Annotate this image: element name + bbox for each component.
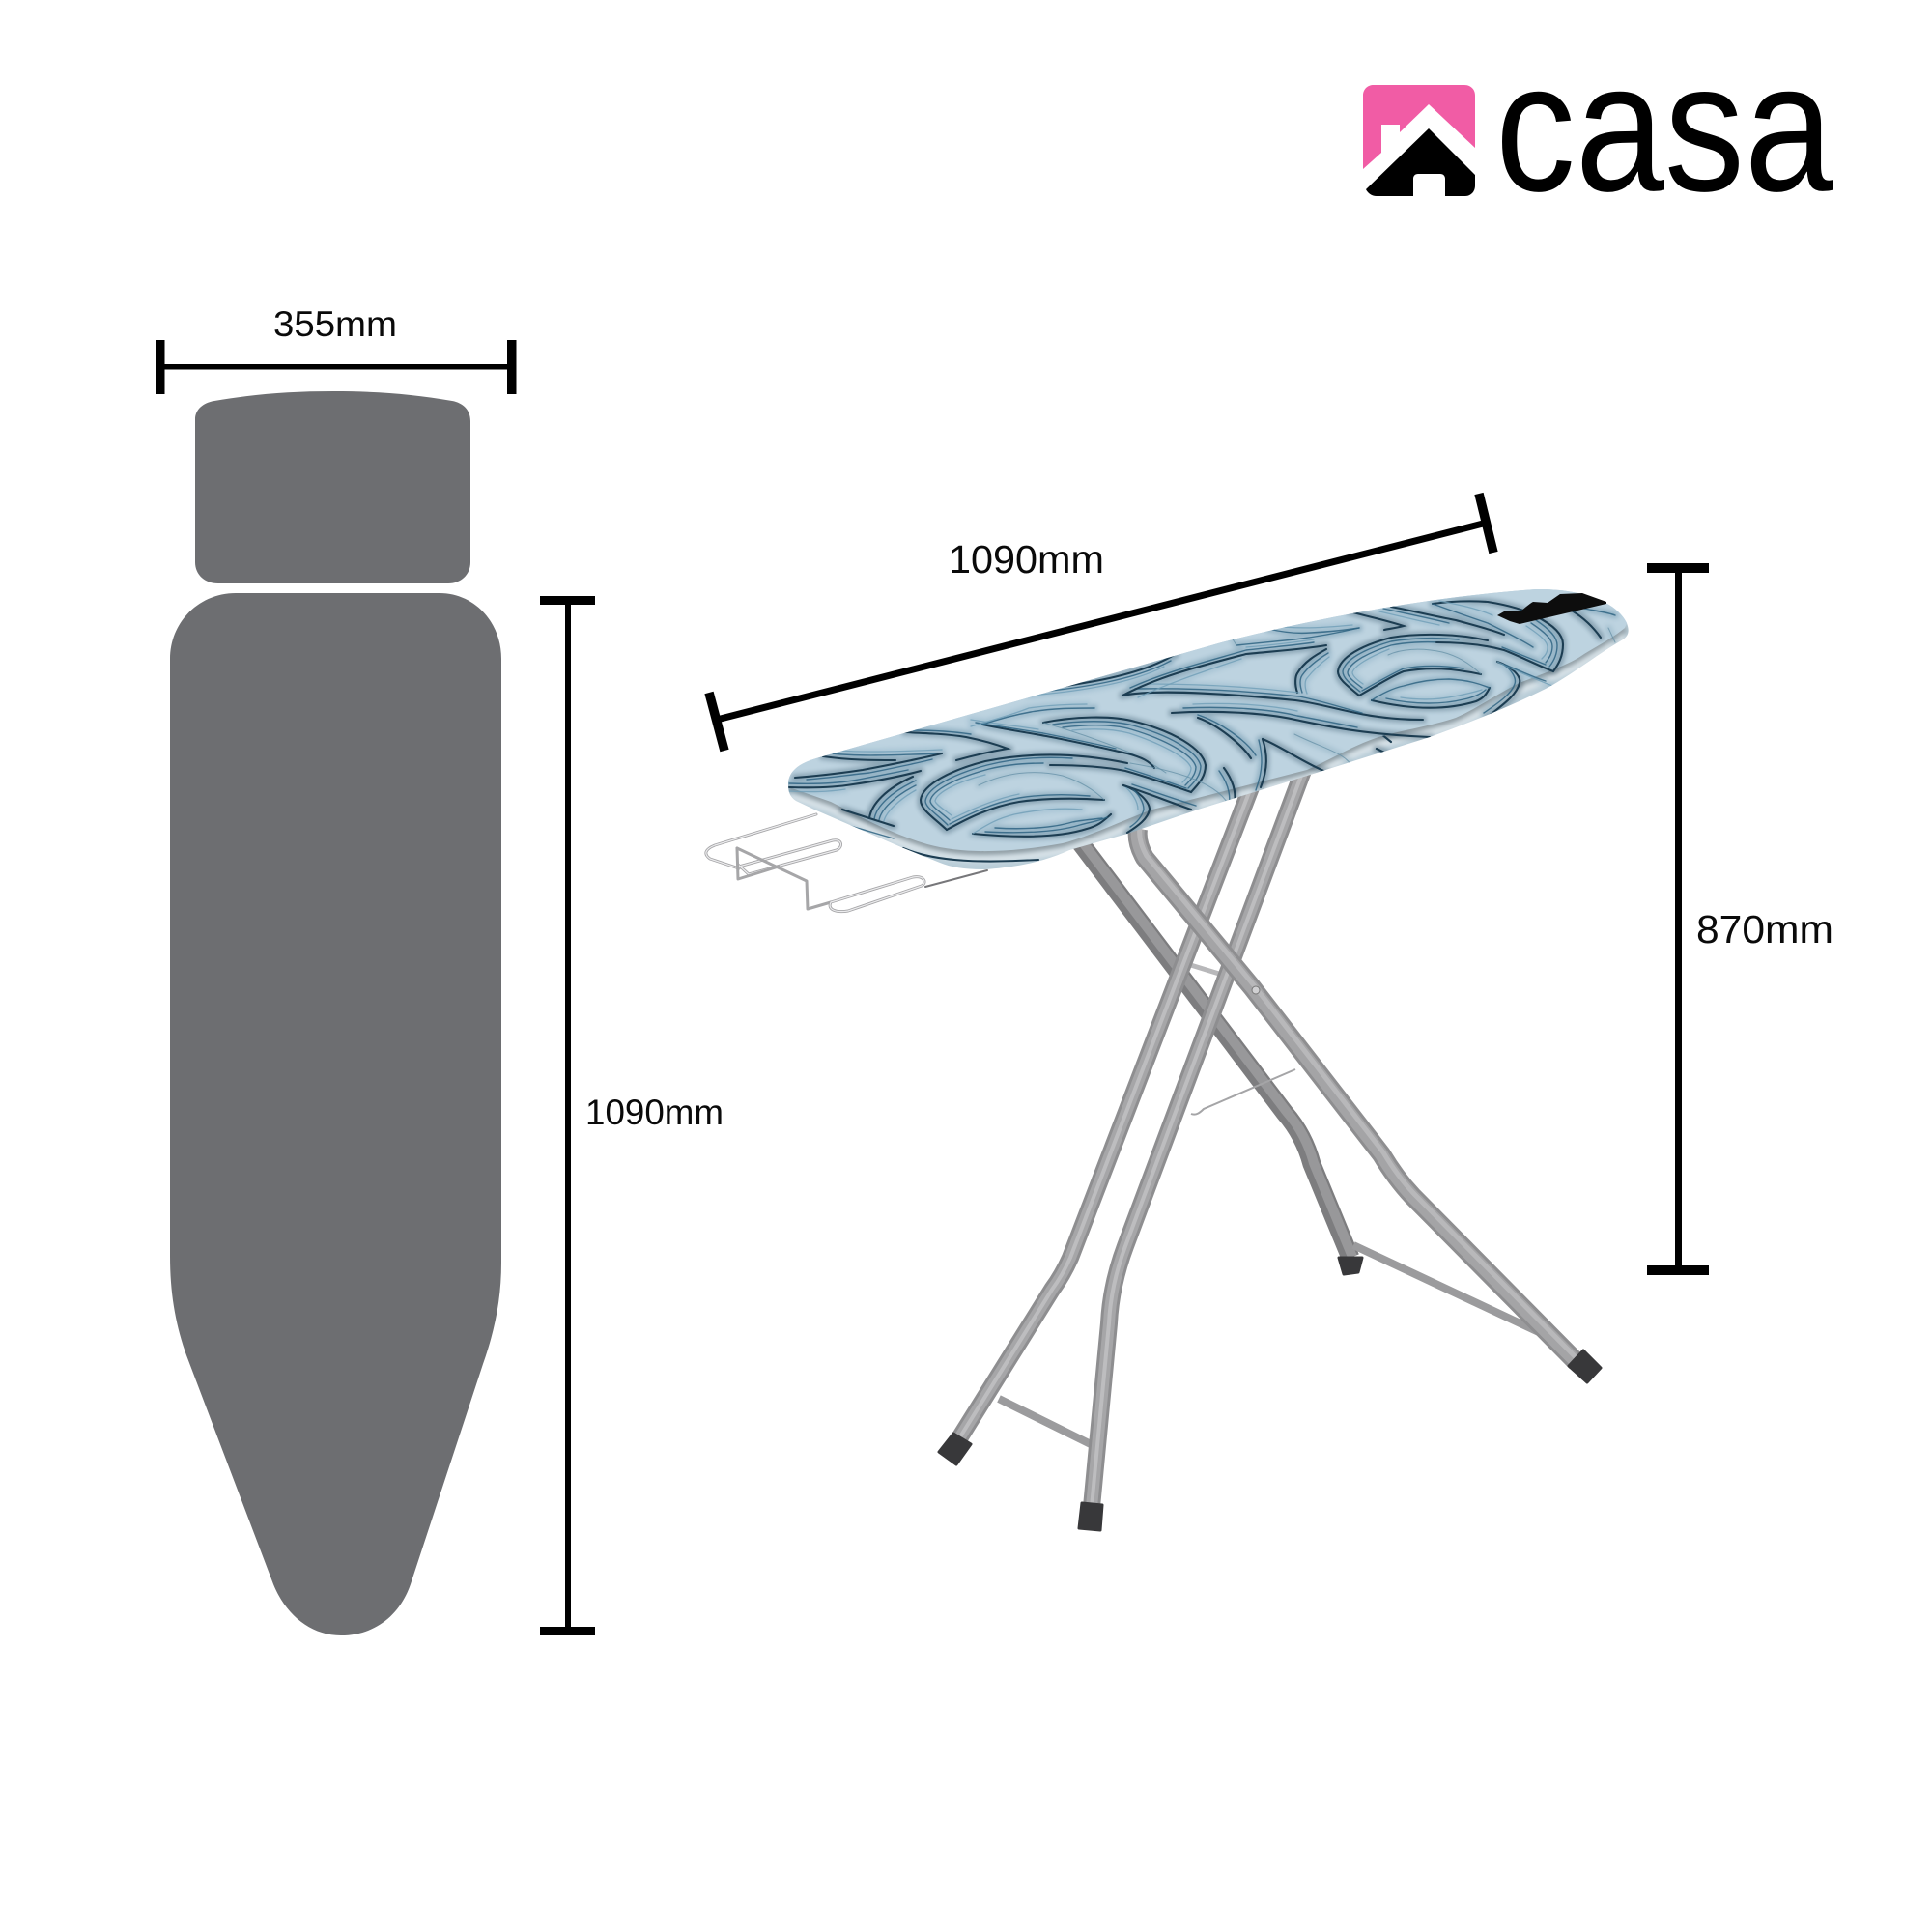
crescent L <box>1372 688 1490 708</box>
lower band lines <box>1130 761 1227 802</box>
ironing board product illustration <box>706 589 1629 1530</box>
dimension: 870mm height <box>1647 563 1833 1275</box>
dimension: 355mm width <box>156 304 516 394</box>
long wave 2 <box>1172 712 1430 737</box>
V shape G <box>905 732 1008 760</box>
dimension: 1090mm length (top view) <box>540 596 724 1635</box>
crescent C (lower) <box>973 814 1111 837</box>
label 870mm: 870mm <box>1696 907 1833 952</box>
foot: front left <box>939 1434 971 1464</box>
board surface (top view) <box>170 593 501 1635</box>
iron rest wire <box>706 814 987 912</box>
motif T <box>1488 662 1520 717</box>
wave P <box>1122 645 1326 696</box>
crescent A <box>921 755 1127 830</box>
left arcs D <box>869 777 913 818</box>
swirl pattern on cover <box>789 601 1615 837</box>
leg: back right <box>1138 827 1578 1362</box>
foot: back right <box>1569 1350 1601 1382</box>
foot: front right <box>1079 1503 1102 1530</box>
crossbar: back <box>1353 1245 1541 1333</box>
board top surface <box>788 589 1627 851</box>
swoosh Q <box>1391 607 1504 635</box>
motif I <box>1123 785 1150 833</box>
label 1090mm left: 1090mm <box>585 1093 724 1132</box>
soft halo behind swirl pattern <box>789 601 1615 837</box>
leaf E <box>823 756 895 760</box>
dimension: 1090mm length (perspective) <box>709 494 1493 751</box>
crescent J <box>1338 635 1488 696</box>
label 1090mm top: 1090mm <box>949 537 1104 582</box>
long wave 1 <box>1122 693 1423 720</box>
leg: back left (dark) <box>1077 838 1352 1258</box>
crossbar: front <box>999 1399 1091 1444</box>
logo: casa <box>1363 25 1833 230</box>
line F <box>789 771 921 787</box>
bolts on leg <box>1252 986 1260 994</box>
right edge S <box>1572 611 1601 638</box>
icon: pink roof square <box>1363 85 1475 169</box>
side band shading <box>789 628 1625 851</box>
black handle strap <box>1497 593 1606 624</box>
leg: front left <box>954 782 1253 1446</box>
crescent B <box>1043 718 1206 792</box>
cable between legs <box>1191 1069 1295 1115</box>
icon: black house <box>1366 128 1475 196</box>
top view of ironing board <box>170 391 501 1635</box>
leg: front right <box>1092 768 1304 1507</box>
crescent K <box>1433 601 1563 671</box>
label 355mm: 355mm <box>273 304 397 344</box>
motif O <box>1350 611 1404 630</box>
motif R triangle <box>1198 718 1251 758</box>
wordmark: casa <box>1495 25 1833 230</box>
swoosh H <box>982 724 1154 768</box>
board cover silhouette <box>788 589 1629 869</box>
foot: back left <box>1339 1258 1362 1274</box>
underside shadow lines <box>903 848 1038 862</box>
rod between legs <box>1184 963 1219 974</box>
arcs M <box>1295 649 1326 693</box>
edge lines <box>1224 768 1235 813</box>
iron rest (top view) <box>195 391 470 583</box>
upper arc near top edge <box>1061 655 1180 689</box>
swirl lines <box>789 601 1615 837</box>
